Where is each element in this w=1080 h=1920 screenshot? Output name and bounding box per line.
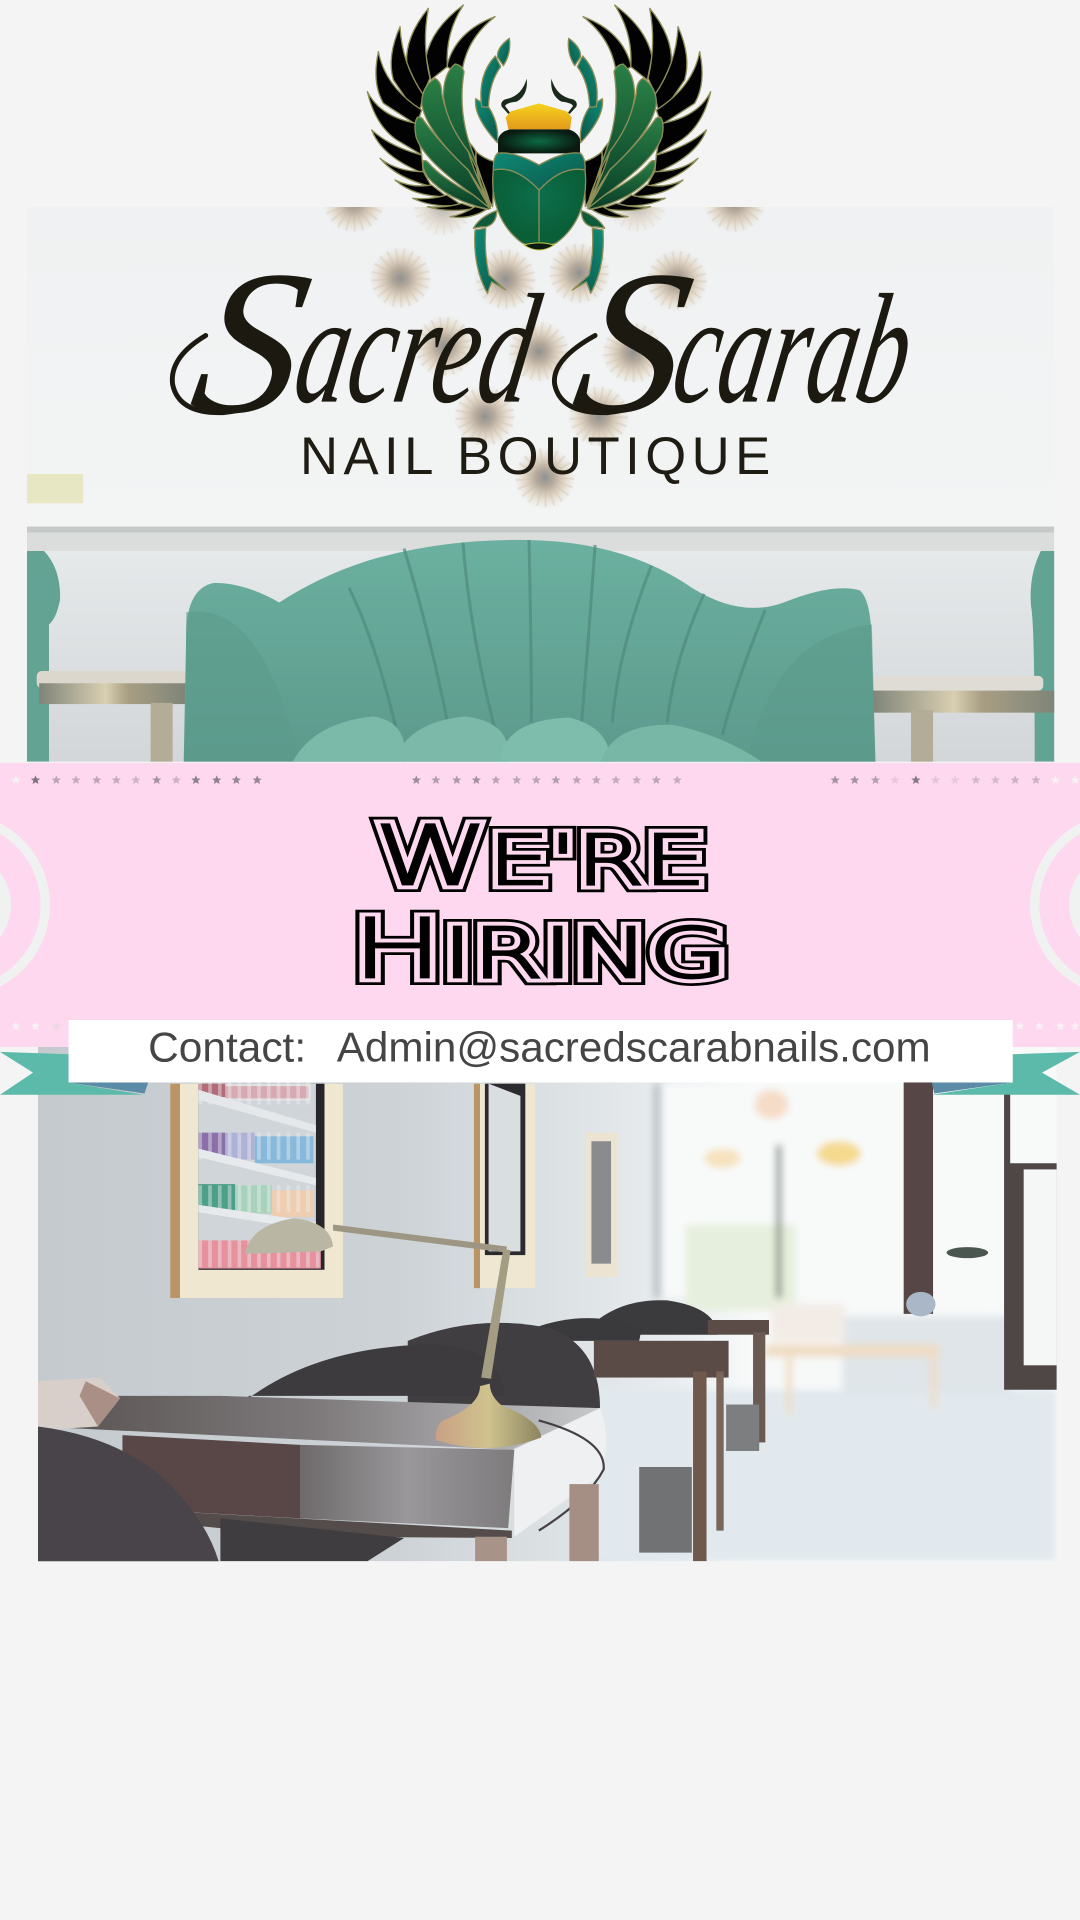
- pink hiring banner: [0, 763, 1080, 1047]
- heading: We're Hiring: HIRING: [353, 903, 727, 997]
- right circle ornament: [1035, 818, 1080, 992]
- polish frame one: [170, 1084, 343, 1298]
- lamp: [245, 1218, 541, 1448]
- right ribbon: [932, 1052, 1080, 1095]
- polish frame two: [474, 1084, 535, 1288]
- heading: We're Hiring: [353, 810, 727, 997]
- brand name: Sacred Scarab: S: [179, 228, 325, 456]
- bottom star row: [11, 1021, 1080, 1030]
- contact text: Admin@sacredscarabnails.com: [337, 1024, 931, 1071]
- top star row: [11, 775, 1080, 784]
- left circle ornament: [0, 818, 45, 992]
- brand name: Sacred Scarab: carab: [662, 263, 926, 436]
- brand name: Sacred Scarab: S: [561, 228, 707, 456]
- heading: We're Hiring: WE'RE: [375, 810, 706, 904]
- chairs and far desks: [249, 1300, 769, 1561]
- front chair: [38, 1427, 220, 1567]
- scarab logo: [367, 5, 711, 293]
- photo: salon interior with desks and polish shelves: [38, 1047, 1060, 1567]
- contact text: Contact:: [148, 1024, 306, 1071]
- photo: lounge with teal velvet chair: [27, 170, 1054, 764]
- heading: We're Hiring: WE'RE: [375, 810, 706, 904]
- contact box: [69, 1020, 1013, 1082]
- heading: We're Hiring: WE'RE: [375, 810, 706, 904]
- brand subtitle: NAIL BOUTIQUE: NAIL BOUTIQUE: [300, 427, 770, 486]
- brand name: Sacred Scarab: acred: [284, 263, 550, 436]
- brand name: Sacred Scarab: [172, 228, 932, 456]
- heading: We're Hiring: HIRING: [353, 903, 727, 997]
- front desk: [38, 1378, 606, 1561]
- left ribbon: [0, 1052, 148, 1095]
- heading: We're Hiring: HIRING: [353, 903, 727, 997]
